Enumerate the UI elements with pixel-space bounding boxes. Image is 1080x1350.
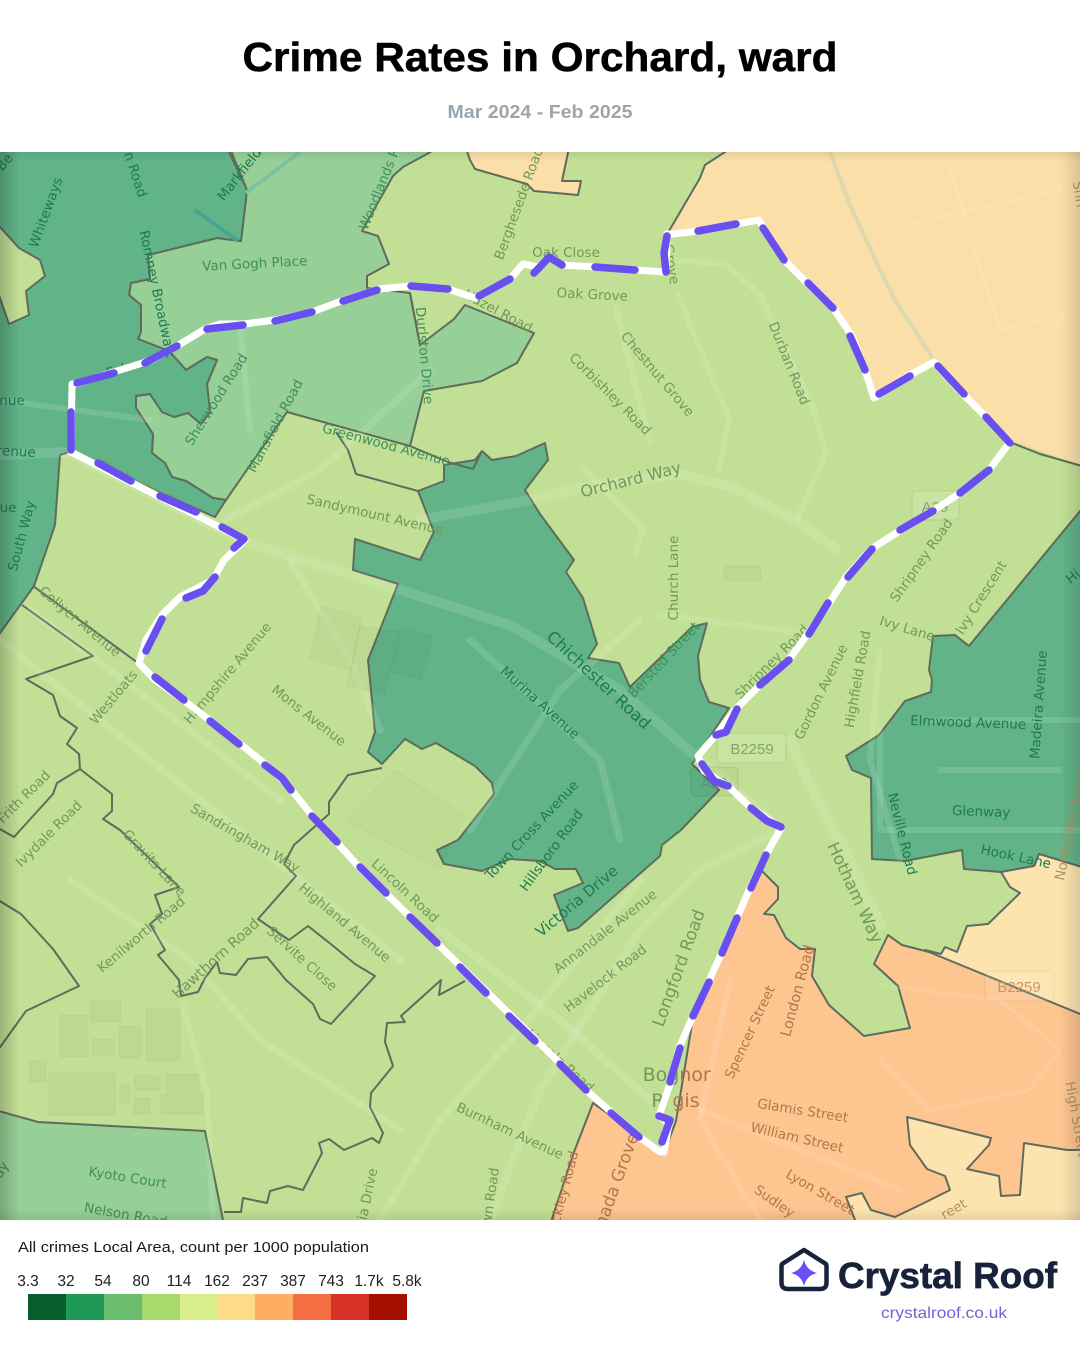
labels on light green: Ivydale Road: [13, 798, 86, 871]
labels on dark green: Romney Broadwalk: [136, 229, 178, 360]
road shield: B2259 east: [985, 971, 1054, 1001]
legend scale labels: 1.7k: [354, 1273, 384, 1290]
labels on light green: Sandymount Avenue: [305, 492, 445, 539]
area: dark green central Chichester Road: [353, 443, 729, 931]
labels on dark green: nue: [0, 393, 25, 409]
labels on light green: Havelock Road: [561, 942, 650, 1016]
legend scale labels: 54: [94, 1273, 112, 1290]
labels on light green: Church Lane: [666, 536, 682, 620]
legend: [17, 1240, 422, 1320]
labels on light green: Chichester Road: [94, 456, 200, 521]
labels on cream and orange: William Street: [749, 1120, 845, 1157]
area: cream north: [466, 148, 581, 195]
area: orange Bognor Regis: [550, 871, 1080, 1225]
labels on light green: Sandringham Way: [188, 801, 302, 876]
labels on cream and orange: Sudley: [751, 1182, 798, 1221]
area: medium green Van Gogh Place: [129, 146, 534, 500]
labels on light green: Annandale Avenue: [551, 887, 660, 977]
labels on light green: ia Drive: [355, 1167, 381, 1221]
legend scale labels: 3.3: [17, 1273, 39, 1290]
road shield: B2259 east: B2259: [997, 979, 1041, 996]
labels on dark green: Murina Avenue: [497, 663, 582, 743]
labels on dark green: Hillsboro Road: [517, 807, 587, 895]
legend title: All crimes Local Area, count per 1000 population: [18, 1240, 369, 1256]
labels on light green: Ivy Lane: [878, 613, 937, 645]
road shield: A29 north: [912, 491, 959, 520]
labels on light green: [0, 145, 1011, 1226]
labels on cream and orange: Glamis Street: [756, 1096, 849, 1126]
labels on light green: Bog: [643, 1064, 679, 1086]
legend scale labels: 80: [132, 1273, 150, 1290]
labels on medium green: Bersted Street: [625, 619, 703, 701]
icon: house with star: [782, 1250, 826, 1289]
labels on light green: Lincoln Road: [522, 1026, 597, 1096]
labels on light green: Servite Close: [263, 923, 340, 995]
labels on light green: Durban Road: [765, 320, 813, 407]
labels on dark green: Chichester Road: [543, 627, 655, 733]
labels on cream and orange: Lyon Street: [783, 1167, 857, 1219]
labels on dark green: Elmwood Avenue: [910, 713, 1026, 733]
labels on cream and orange: London Road: [778, 943, 818, 1039]
legend scale labels: 5.8k: [392, 1273, 422, 1290]
labels on light green: Lincoln Road: [368, 856, 442, 926]
labels on light green: Gravits Lane: [119, 827, 189, 900]
labels on dark green: ue: [0, 500, 16, 516]
legend scale labels: 743: [318, 1273, 344, 1290]
labels on light green: Hawthorn Road: [170, 916, 263, 1002]
labels on light green: Oak Grove: [556, 285, 628, 305]
area: dark green north-west: [0, 147, 247, 640]
area: cream south-east: [840, 854, 1080, 1225]
legend colour bar: [28, 1294, 407, 1320]
subtitle: date range: Mar 2024 - Feb 2025: [448, 101, 632, 122]
stream: [195, 152, 300, 241]
road network: [0, 170, 1080, 1220]
labels on medium green: [0, 138, 703, 1230]
neighbourhood boundary lines: [0, 293, 482, 1212]
legend scale labels: 237: [242, 1273, 268, 1290]
labels on light green: Kenilworth Road: [94, 894, 188, 976]
area: light green pocket west: [0, 222, 45, 324]
labels on light green: Highfield Road: [842, 629, 874, 729]
labels on light green: Hotham Way: [822, 839, 887, 947]
labels on light green: Berghesede Road: [491, 145, 547, 262]
labels on medium green: Van Gogh Place: [202, 253, 308, 275]
labels on medium green: Nelson Road: [83, 1200, 169, 1230]
labels on dark green: Hook Lane: [979, 842, 1052, 872]
labels on dark green: South Way: [5, 499, 39, 573]
labels on medium green: Woodlands Ro: [356, 138, 407, 233]
legend scale labels: 387: [280, 1273, 306, 1290]
labels on medium green: Mansfield Road: [244, 377, 307, 475]
labels on cream and orange: nor: [679, 1064, 711, 1086]
road shield: B2259: [717, 733, 786, 763]
labels on cream and orange: reet: [938, 1196, 970, 1223]
labels on light green: Westloats: [87, 667, 141, 728]
area: dark green east Elmwood Avenue: [846, 505, 1080, 872]
labels on dark green: Markfield: [214, 145, 265, 204]
labels on light green: Shripney Road: [887, 516, 956, 605]
logo: Crystal Roof: [782, 1250, 1058, 1322]
labels on medium green: Durlston Drive: [412, 306, 436, 405]
labels on light green: Hampshire Avenue: [181, 619, 275, 727]
labels on light green: Gordon Avenue: [791, 642, 851, 742]
wordmark: Crystal Roof: [838, 1255, 1058, 1296]
labels on light green: Oak Close: [532, 245, 600, 261]
labels on light green: Mons Avenue: [268, 682, 349, 750]
purple dashes along ward boundary: [71, 224, 1010, 1142]
labels on cream and orange: nada Grove: [591, 1131, 644, 1230]
labels on light green: R: [651, 1090, 665, 1112]
labels on dark green: Glenway: [952, 803, 1011, 821]
map base: light green areas: [0, 152, 1080, 1220]
railway line: [830, 152, 935, 362]
road shield: A29 north: A29: [922, 499, 948, 516]
labels on dark green: Madeira Avenue: [1027, 650, 1051, 760]
area: medium green Kyoto Court: [0, 1110, 224, 1225]
labels on light green: wn Road: [479, 1167, 503, 1226]
labels on light green: Grove: [660, 243, 682, 286]
labels on dark green: Neville Road: [884, 791, 920, 877]
labels on cream and orange: ckley Road: [548, 1149, 582, 1225]
legend scale labels: 32: [57, 1273, 75, 1290]
road shield: A29 south: [691, 767, 738, 796]
labels on dark green: [0, 142, 1080, 941]
labels on light green: Hazel Road: [461, 287, 535, 336]
legend scale labels: [17, 1273, 422, 1290]
labels on cream and orange: Spencer Street: [722, 983, 779, 1081]
labels on medium green: Kyoto Court: [87, 1164, 168, 1192]
labels on dark green: Whiteways: [26, 175, 66, 250]
legend scale labels: 114: [167, 1273, 192, 1290]
website: crystalroof.co.uk: [881, 1305, 1008, 1322]
road shield: A29 south: A29: [701, 775, 727, 792]
title: Crime Rates in Orchard, ward: [242, 34, 838, 80]
labels on light green: Burnham Avenue: [454, 1100, 566, 1163]
labels on light green: Ivy Crescent: [953, 558, 1011, 638]
labels on dark green: Fulmar: [104, 353, 154, 382]
labels on medium green: Greenwood Avenue: [320, 420, 452, 470]
labels on cream and orange: [548, 180, 1080, 1230]
labels on light green: Orchard Way: [578, 458, 683, 501]
map edge vignette: [0, 152, 1080, 1220]
labels on cream and orange: gis: [672, 1090, 700, 1112]
labels on light green: Longford Road: [649, 907, 710, 1030]
labels on light green: Highland Avenue: [296, 880, 394, 966]
labels on light green: Shripney Road: [732, 622, 812, 702]
ward boundary: Orchard: [71, 220, 1010, 1152]
labels on dark green: on Road: [118, 142, 150, 199]
labels on light green: Chestnut Grove: [617, 329, 697, 420]
area: north-east boundary line: [669, 150, 728, 231]
labels on dark green: Town Cross Avenue: [481, 777, 582, 884]
legend scale labels: 162: [204, 1273, 230, 1290]
labels on light green: Collyer Avenue: [36, 583, 124, 661]
labels on light green: Corbishley Road: [566, 350, 654, 438]
road shield: B2259: B2259: [730, 741, 774, 758]
labels on dark green: Victoria Drive: [532, 862, 622, 941]
labels on medium green: Sherwood Road: [182, 351, 251, 449]
building footprints: [30, 566, 761, 1115]
area: cream north-east: [669, 148, 1080, 467]
